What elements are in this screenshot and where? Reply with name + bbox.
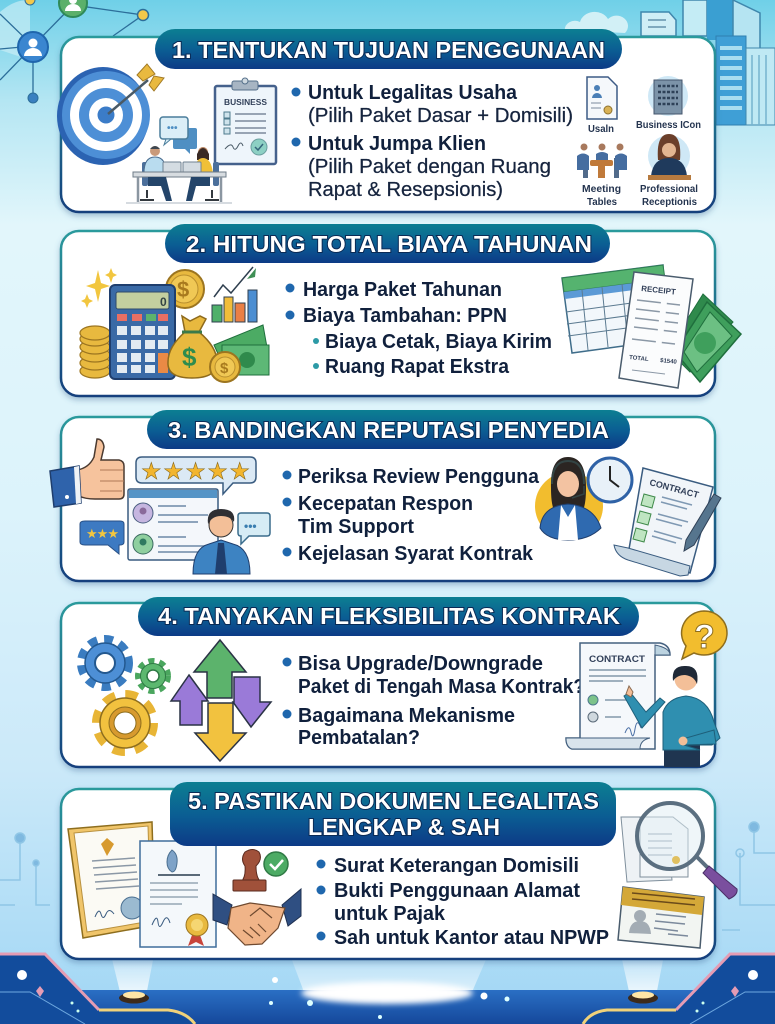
heading pill 4: 4. TANYAKAN FLEKSIBILITAS KONTRAK [158, 603, 620, 629]
icon: meeting table: Tables [587, 197, 617, 208]
icon: large coin: $ [177, 277, 189, 302]
icon: thumbs up [50, 439, 124, 507]
bullet list: Biaya Tambahan: PPN [303, 305, 507, 327]
icon: five star bubble [136, 457, 256, 494]
icon: clock [588, 458, 632, 502]
bullet list: Bagaimana Mekanisme [298, 705, 515, 727]
panel 1 card [61, 37, 715, 212]
bullet list: Biaya Cetak, Biaya Kirim [325, 331, 552, 353]
icon: sparkles [81, 268, 117, 308]
icon: receptionist [640, 134, 698, 208]
icon: green check [264, 852, 288, 876]
bullet list: Sah untuk Kantor atau NPWP [334, 927, 609, 949]
bullet list: Periksa Review Pengguna [298, 466, 540, 488]
panel 3: bandingkan reputasi penyedia [50, 410, 721, 581]
heading pill 1: 1. TENTUKAN TUJUAN PENGGUNAAN [172, 37, 605, 63]
network graphic top left [0, 0, 148, 103]
icon: cash stack [214, 325, 269, 375]
icon: meeting table: Meeting [582, 184, 621, 195]
icon: receptionist: Receptionis [642, 197, 697, 208]
icon: business building [636, 76, 701, 131]
icon: growth chart [212, 267, 257, 322]
heading pill 1 [155, 29, 622, 69]
icon: money bag: $ [182, 342, 197, 372]
bullet list: Harga Paket Tahunan [303, 279, 502, 301]
icon: business building: Business ICon [636, 120, 701, 131]
icon: small coin: $ [220, 360, 229, 377]
bullet list [286, 279, 552, 378]
icon: contract scroll: CONTRACT [589, 654, 646, 664]
bullet list: Surat Keterangan Domisili [334, 855, 579, 877]
icon: contract checklist [614, 468, 721, 576]
icon: calculator: 0 [160, 295, 167, 309]
bullet list: Untuk Jumpa Klien [308, 133, 486, 155]
icon: spreadsheet [562, 265, 667, 353]
icon: three star bubble [80, 521, 124, 554]
heading pill 2: 2. HITUNG TOTAL BIAYA TAHUNAN [186, 231, 592, 257]
bullet list: Tim Support [298, 516, 414, 538]
icon: meeting table [577, 144, 627, 208]
heading pill 5: 5. PASTIKAN DOKUMEN LEGALITAS [188, 788, 599, 814]
icon: three star bubble: ★★★ [86, 526, 119, 541]
panel 5: pastikan dokumen legalitas [61, 782, 737, 959]
icon: presenter man [624, 666, 720, 767]
icon: receipt [619, 272, 693, 388]
bullet list [282, 466, 540, 565]
heading pill 5: LENGKAP & SAH [308, 814, 500, 840]
icon: two people at desk [126, 117, 232, 203]
icon: typing bubble [238, 513, 270, 544]
spotlights and glow [119, 977, 658, 1019]
icon: man with tie [193, 509, 250, 574]
panel 4 card [61, 603, 715, 767]
bullet list: Untuk Legalitas Usaha [308, 82, 518, 104]
icon: handshake [213, 889, 301, 945]
panel 4: tanyakan fleksibilitas kontrak [61, 597, 727, 767]
icon: white certificate [140, 841, 216, 947]
bullet list: Bukti Penggunaan Alamat [334, 880, 580, 902]
icon: contract scroll [566, 643, 670, 749]
bullet list: Ruang Rapat Ekstra [325, 356, 510, 378]
bullet list: Kecepatan Respon [298, 493, 473, 515]
bullet list: Paket di Tengah Masa Kontrak? [298, 676, 585, 698]
icon: cash right [668, 294, 741, 382]
icon: calculator [110, 285, 175, 379]
panel 2 card [61, 231, 715, 396]
icon: receipt: TOTAL [629, 355, 649, 363]
bullet list: Bisa Upgrade/Downgrade [298, 653, 543, 675]
bullet list [282, 653, 585, 749]
icon: typing bubble: ••• [244, 519, 257, 533]
heading pill 4 [138, 597, 639, 636]
icon: gears [81, 639, 168, 751]
icon: usaha document: Usaln [588, 124, 614, 135]
panel 1: tentukan tujuan penggunaan [57, 29, 715, 212]
bottom circuit decoration [0, 954, 775, 1024]
bullet list: (Pilih Paket dengan Ruang [308, 156, 551, 178]
icon: five star bubble: ★★★★★ [141, 458, 250, 484]
cloud and buildings top right [565, 0, 775, 125]
icon: gold certificate [68, 822, 155, 938]
icon: coins stack [80, 326, 110, 378]
heading pill 2 [165, 224, 610, 263]
bullet list: (Pilih Paket Dasar + Domisili) [308, 105, 573, 127]
icon: large coin [166, 270, 204, 308]
icon: money bag [168, 316, 217, 378]
icon: question bubble [682, 611, 727, 659]
icon: two people at desk: ••• [167, 123, 178, 134]
side circuit lines [0, 822, 775, 930]
icon: up and down arrows [171, 640, 271, 761]
icon: business clipboard: BUSINESS [224, 98, 268, 107]
icon: usaha document [587, 77, 617, 135]
heading pill 3 [147, 410, 630, 449]
stage lights [111, 955, 664, 996]
icon: receipt: RECEIPT [641, 284, 676, 297]
panel 2: hitung total biaya tahunan [61, 224, 741, 396]
icon: target with arrow [57, 64, 164, 165]
icon: question bubble: ? [694, 618, 715, 656]
heading pill 3: 3. BANDINGKAN REPUTASI PENYEDIA [168, 417, 609, 443]
icon: small coin [210, 352, 240, 382]
bullet list: Rapat & Resepsionis) [308, 179, 503, 201]
heading pill 5 [170, 782, 616, 846]
icon: receptionist: Professional [640, 184, 698, 195]
icon: ID card [618, 887, 704, 948]
icon: receipt: $1540 [660, 358, 678, 366]
icon: support agent [535, 457, 603, 540]
icon: contract checklist: CONTRACT [648, 477, 700, 500]
bullet list: Kejelasan Syarat Kontrak [298, 543, 534, 565]
icon: magnifier with documents [621, 803, 737, 899]
bullet list [316, 855, 609, 949]
bullet list: untuk Pajak [334, 903, 446, 925]
icon: stamp [233, 850, 266, 891]
icon: review window [128, 489, 218, 560]
panel 3 card [61, 417, 715, 581]
bullet list [292, 82, 573, 201]
icon: business clipboard [215, 78, 276, 164]
panel 5 card [61, 789, 715, 959]
bullet list: Pembatalan? [298, 727, 420, 749]
